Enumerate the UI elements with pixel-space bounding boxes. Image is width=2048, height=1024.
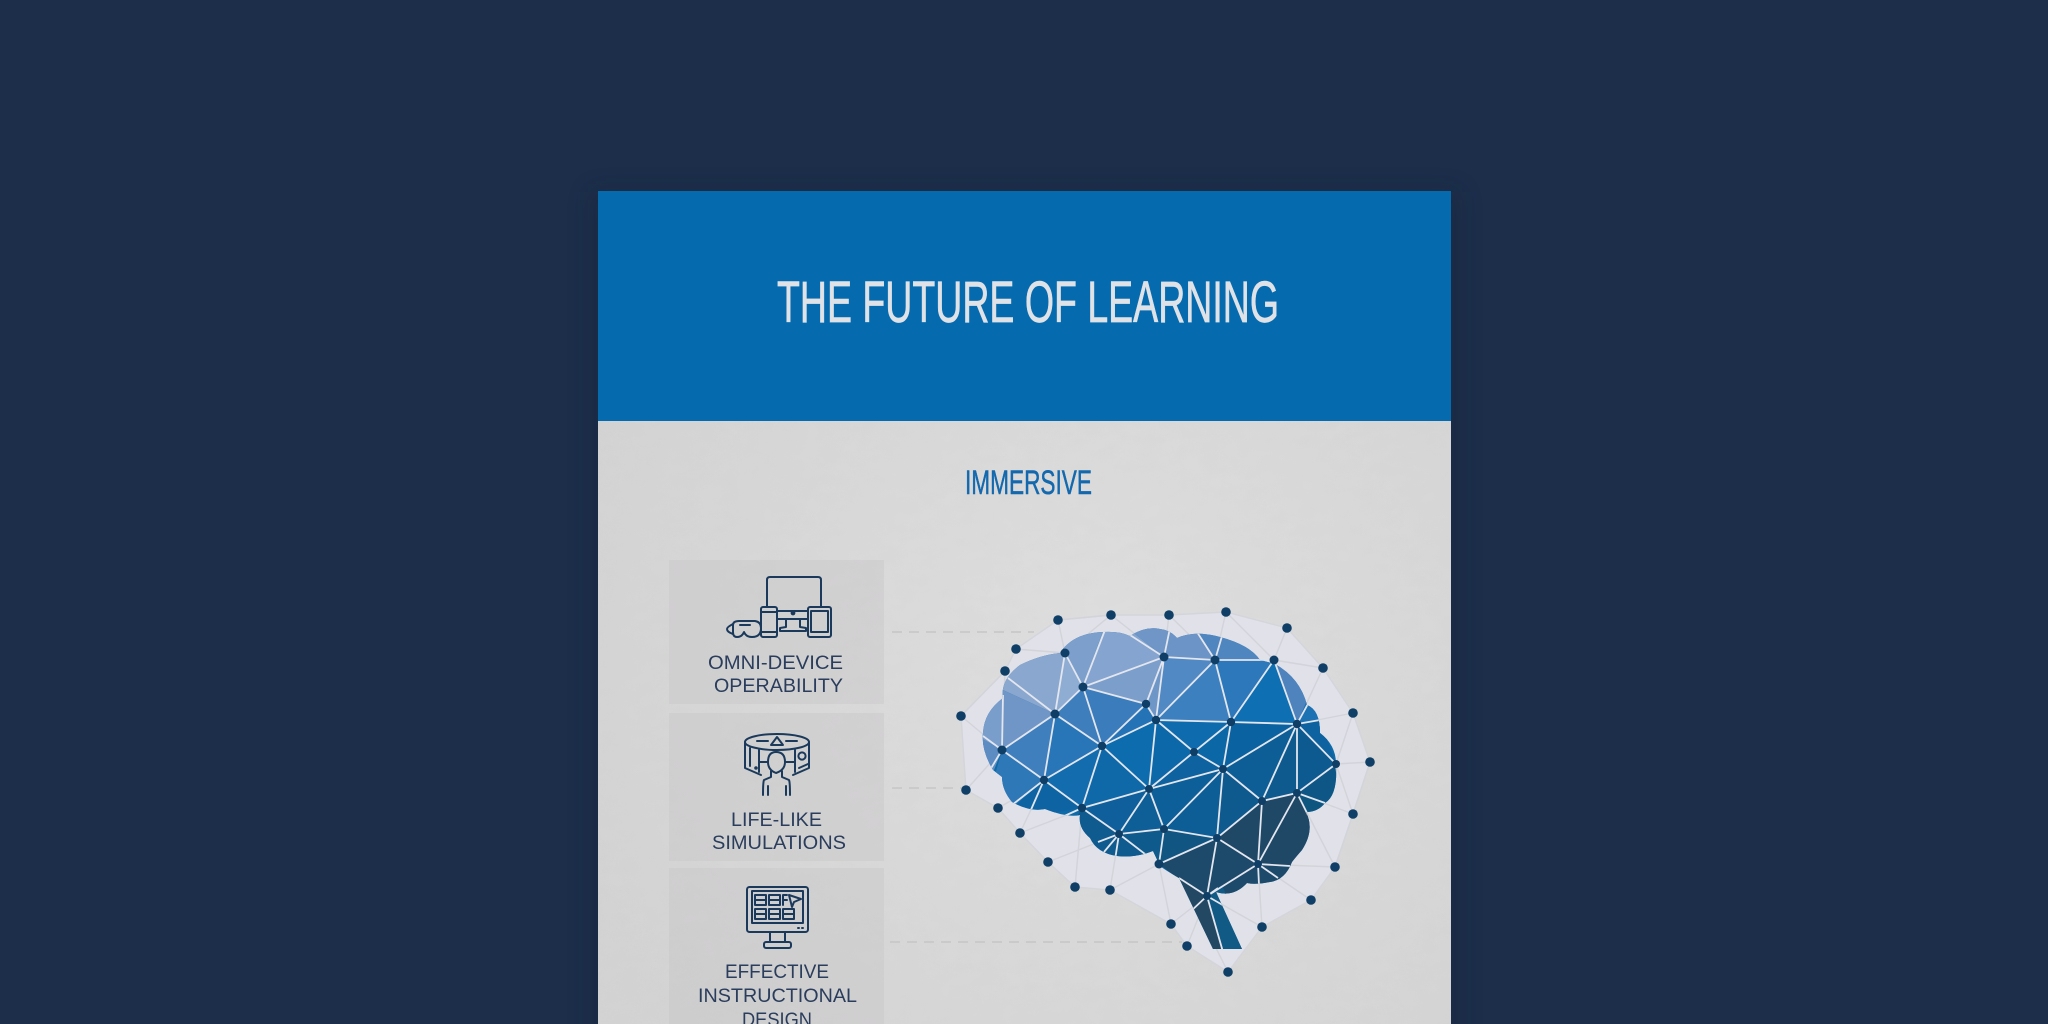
network halo — [961, 612, 1370, 972]
icon: monitor with course grid — [747, 887, 808, 948]
chart: brain network illustration — [956, 607, 1375, 977]
label: life-like simulations — [712, 810, 846, 854]
title: THE FUTURE OF LEARNING — [777, 270, 1279, 335]
icon: person in simulation ring — [745, 734, 809, 795]
network lines — [961, 612, 1370, 972]
panel: poster body — [598, 421, 1451, 1024]
poster shadow — [592, 192, 1458, 1024]
label: effective instructional design: INSTRUCTIONAL — [698, 986, 857, 1007]
label: omni-device operability: OPERABILITY — [714, 676, 843, 697]
label: effective instructional design: EFFECTIVE — [725, 962, 829, 983]
label: effective instructional design — [698, 962, 857, 1024]
outer nodes — [956, 607, 1375, 977]
inner nodes — [998, 648, 1340, 900]
heading: immersive: IMMERSIVE — [965, 464, 1092, 502]
label: life-like simulations: SIMULATIONS — [712, 833, 846, 854]
icon: devices — [727, 577, 831, 637]
panel: life-like simulations — [669, 713, 884, 861]
label: omni-device operability: OMNI-DEVICE — [708, 653, 843, 674]
panel: header band — [598, 191, 1451, 421]
dashed connectors — [890, 632, 1182, 942]
brain shape and facets — [982, 628, 1336, 949]
label: omni-device operability — [708, 653, 843, 697]
panel: effective instructional design — [669, 868, 884, 1024]
panel: omni-device operability — [669, 560, 884, 704]
brain facet lines — [983, 628, 1340, 952]
label: life-like simulations: LIFE-LIKE — [731, 810, 822, 831]
